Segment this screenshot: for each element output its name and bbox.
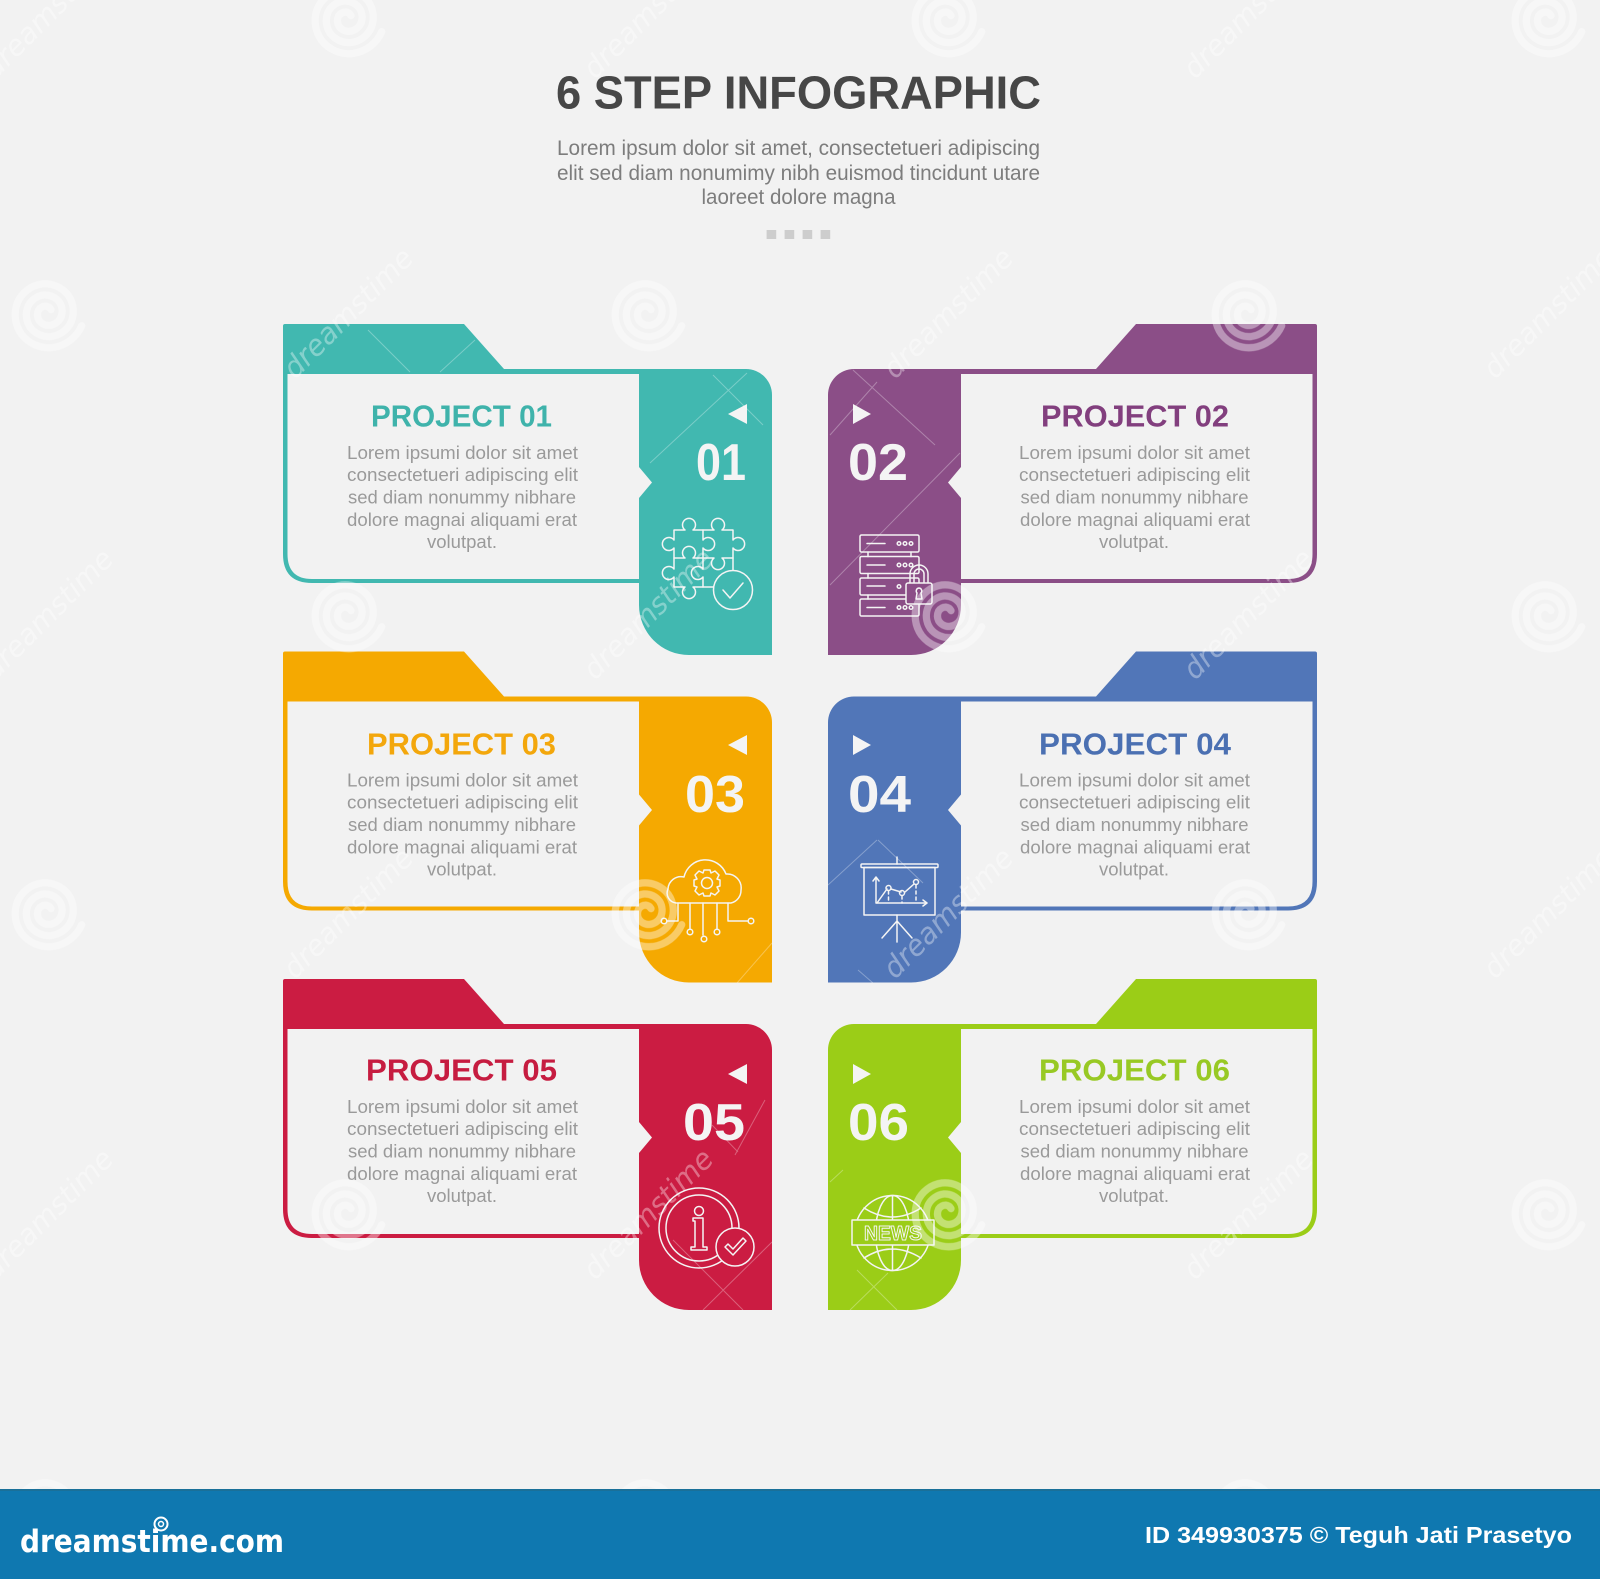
description 06: dolore magnai aliquami erat xyxy=(1020,1163,1250,1184)
heading 05: PROJECT 05 xyxy=(366,1052,557,1088)
panel: project 01 xyxy=(283,324,772,655)
description 04 xyxy=(1019,770,1250,880)
description 05: Lorem ipsumi dolor sit amet xyxy=(347,1096,578,1117)
number 01: 01 xyxy=(696,434,746,492)
description 03: Lorem ipsumi dolor sit amet xyxy=(347,770,578,790)
description 06: consectetueri adipiscing elit xyxy=(1019,1118,1250,1139)
description 02: sed diam nonummy nibhare xyxy=(1020,486,1248,508)
description 02: Lorem ipsumi dolor sit amet xyxy=(1019,442,1250,463)
card frame 06 xyxy=(828,979,1317,1310)
description 01: dolore magnai aliquami erat xyxy=(347,509,577,530)
panel: project 06 xyxy=(828,979,1317,1310)
footer logo: dreamstime.com xyxy=(20,1524,284,1560)
icon: puzzle with check xyxy=(662,518,752,610)
description 03: dolore magnai aliquami erat xyxy=(347,836,577,858)
description 05: dolore magnai aliquami erat xyxy=(347,1163,577,1184)
number 04: 04 xyxy=(848,766,911,824)
description 01: Lorem ipsumi dolor sit amet xyxy=(347,442,578,463)
icon: globe with news banner xyxy=(852,1196,934,1270)
heading 01: PROJECT 01 xyxy=(371,398,552,434)
description 04: volutpat. xyxy=(1099,858,1169,880)
description 06: volutpat. xyxy=(1099,1185,1169,1206)
panel: project 04 xyxy=(828,652,1317,982)
watermark overlay: dreamstime xyxy=(576,1142,720,1286)
number 06: 06 xyxy=(848,1094,909,1152)
description 03: consectetueri adipiscing elit xyxy=(347,792,578,812)
icon: server with lock xyxy=(860,535,932,616)
subtitle text block xyxy=(557,137,1040,209)
arrow 01 xyxy=(728,404,747,424)
card frame 02 xyxy=(828,324,1317,655)
description 03: sed diam nonummy nibhare xyxy=(348,814,576,835)
description 02: dolore magnai aliquami erat xyxy=(1020,509,1250,530)
number 03: 03 xyxy=(685,766,745,824)
arrow 05 xyxy=(728,1064,747,1084)
description 04: consectetueri adipiscing elit xyxy=(1019,792,1250,812)
card frame 03 xyxy=(283,652,772,982)
description 05: consectetueri adipiscing elit xyxy=(347,1118,578,1139)
description 05: volutpat. xyxy=(427,1185,497,1206)
watermark overlay: dreamstime xyxy=(1176,1142,1320,1286)
card frame 05 xyxy=(283,979,772,1310)
description 06: Lorem ipsumi dolor sit amet xyxy=(1019,1096,1250,1117)
description 03: volutpat. xyxy=(427,858,497,880)
description 01: volutpat. xyxy=(427,531,497,552)
arrow 06 xyxy=(853,1064,871,1084)
subtitle text block: Lorem ipsum dolor sit amet, consectetueri adipiscing xyxy=(557,137,1040,160)
footer bar xyxy=(0,1489,1600,1579)
heading 04: PROJECT 04 xyxy=(1039,726,1232,762)
panel: project 02 xyxy=(828,324,1317,655)
description 02 xyxy=(1019,442,1250,552)
description 04: sed diam nonummy nibhare xyxy=(1020,814,1248,835)
heading 06: PROJECT 06 xyxy=(1039,1052,1230,1088)
icon: presentation board xyxy=(861,857,938,942)
description 03 xyxy=(347,770,578,880)
description 05 xyxy=(347,1096,578,1206)
description 01: sed diam nonummy nibhare xyxy=(348,486,576,508)
description 04: dolore magnai aliquami erat xyxy=(1020,836,1250,858)
panel: project 05 xyxy=(283,979,772,1310)
card frame 04 xyxy=(828,652,1317,982)
description 01: consectetueri adipiscing elit xyxy=(347,464,578,485)
watermark overlay: dreamstime xyxy=(276,241,420,385)
icon: cloud with gear xyxy=(661,860,754,942)
number 02: 02 xyxy=(848,434,908,492)
watermark overlay: dreamstime xyxy=(576,542,720,686)
heading 03: PROJECT 03 xyxy=(367,726,556,762)
footer credit: ID 349930375 © Teguh Jati Prasetyo xyxy=(1145,1522,1572,1548)
watermark overlay: dreamstime xyxy=(876,241,1020,385)
decorative dots under subtitle xyxy=(767,230,830,239)
heading 02: PROJECT 02 xyxy=(1041,398,1229,434)
panel: project 03 xyxy=(283,652,772,982)
arrow 04 xyxy=(853,735,871,755)
icon: globe with news banner: NEWS xyxy=(864,1223,922,1245)
subtitle text block: elit sed diam nonumimy nibh euismod tincidunt utare xyxy=(557,162,1040,185)
subtitle text block: laoreet dolore magna xyxy=(702,186,896,209)
description 02: volutpat. xyxy=(1099,531,1169,552)
watermark overlay: dreamstime xyxy=(276,841,420,985)
icon: info with check xyxy=(659,1188,754,1268)
title: 6 STEP INFOGRAPHIC xyxy=(556,66,1041,118)
arrow 03 xyxy=(728,735,747,755)
description 06: sed diam nonummy nibhare xyxy=(1020,1140,1248,1162)
description 04: Lorem ipsumi dolor sit amet xyxy=(1019,770,1250,790)
watermark overlay: dreamstime xyxy=(876,841,1020,985)
number 05: 05 xyxy=(683,1094,745,1152)
arrow 02 xyxy=(853,404,871,424)
card frame 01 xyxy=(283,324,772,655)
description 01 xyxy=(347,442,578,552)
description 06 xyxy=(1019,1096,1250,1206)
description 05: sed diam nonummy nibhare xyxy=(348,1140,576,1162)
watermark overlay: dreamstime xyxy=(1176,542,1320,686)
description 02: consectetueri adipiscing elit xyxy=(1019,464,1250,485)
